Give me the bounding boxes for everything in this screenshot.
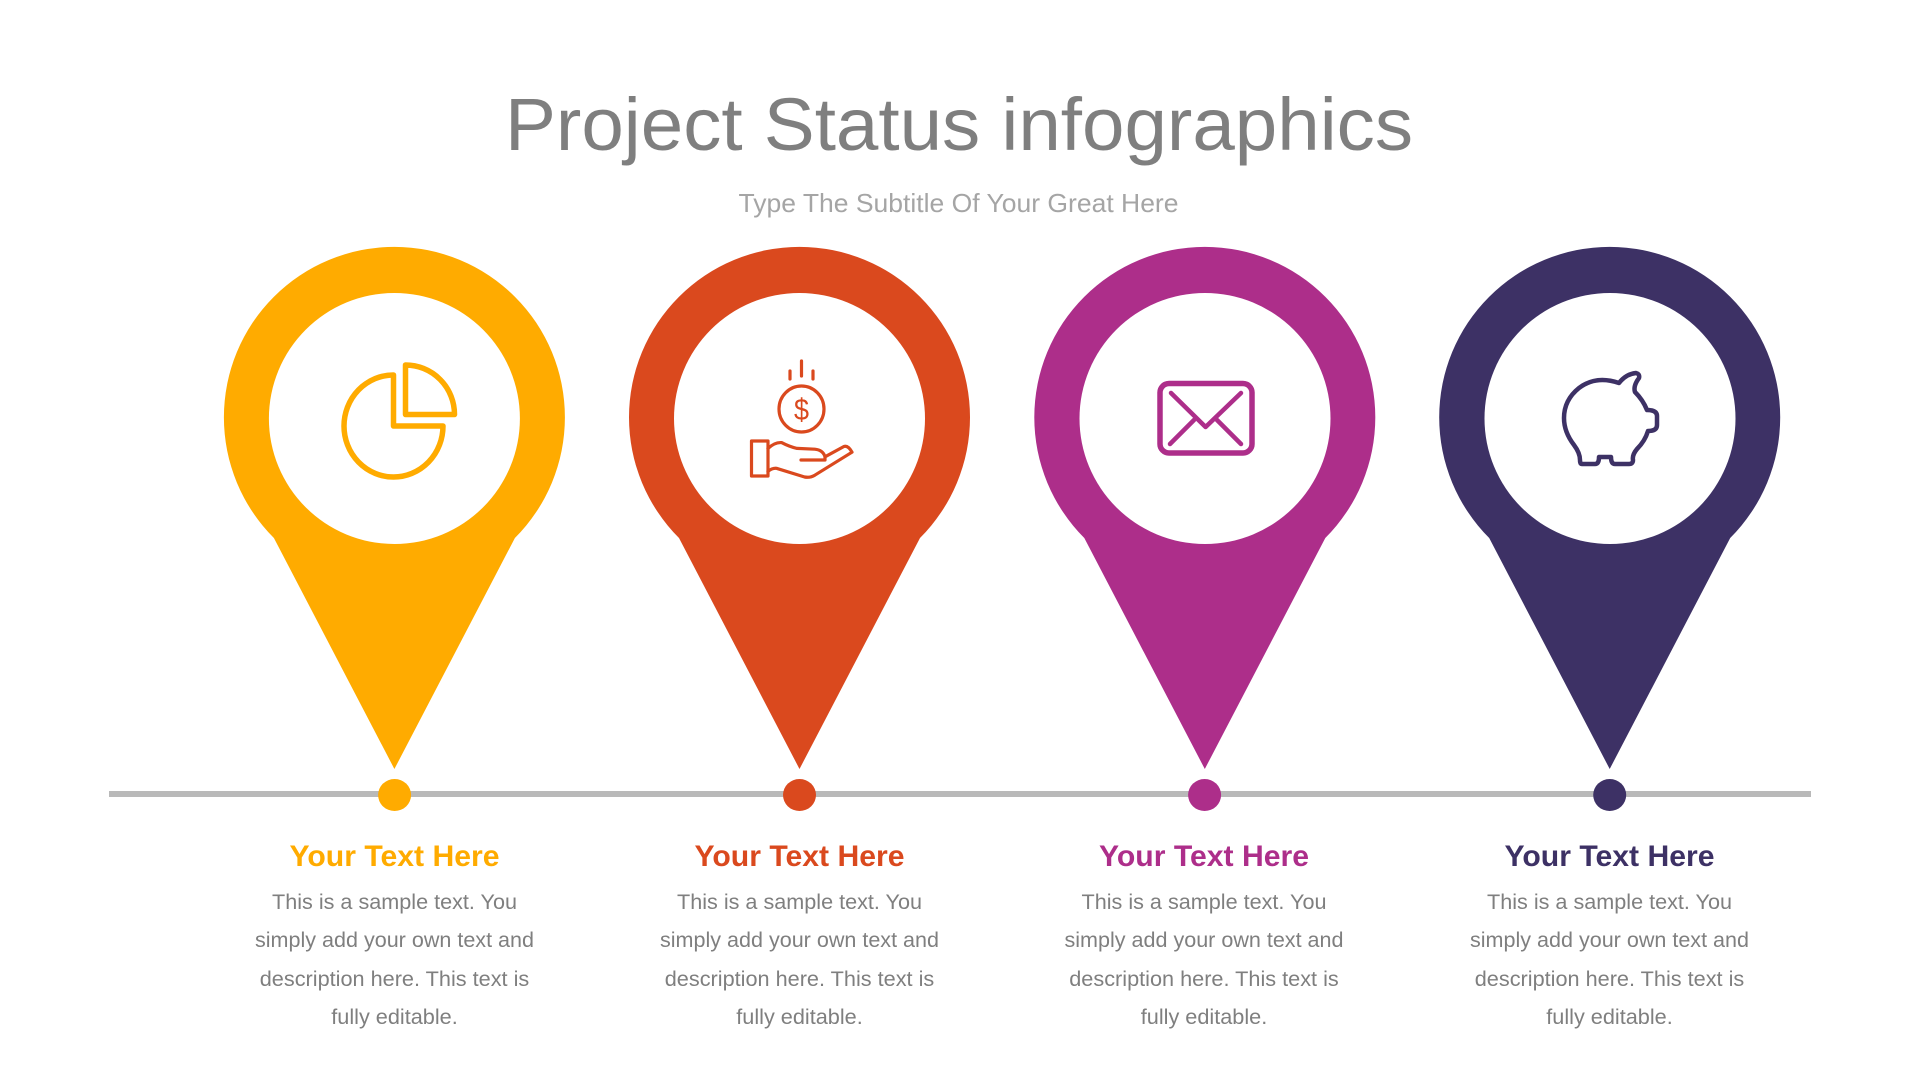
pin inner circle (1484, 293, 1736, 544)
icon: piggy bank (1564, 373, 1657, 464)
description: simply add your own text and (1470, 929, 1749, 952)
description: simply add your own text and (660, 929, 939, 952)
pin shape (629, 247, 970, 769)
description: fully editable. (1546, 1006, 1673, 1029)
description: This is a sample text. You (272, 891, 517, 914)
description: fully editable. (331, 1006, 458, 1029)
description: description here. This text is (1475, 968, 1744, 991)
pin inner circle (674, 293, 925, 544)
description: fully editable. (736, 1006, 863, 1029)
description: description here. This text is (260, 968, 529, 991)
description: simply add your own text and (255, 929, 534, 952)
icon: hand with coin: $ (794, 392, 809, 427)
description: This is a sample text. You (1487, 891, 1732, 914)
pin shape (224, 247, 565, 769)
heading: Your Text Here (290, 840, 500, 873)
title: Project Status infographics (505, 83, 1413, 166)
pin shape (1439, 247, 1780, 769)
pin shape (1034, 247, 1375, 769)
heading: Your Text Here (1504, 840, 1714, 873)
column 4: navy pin (1439, 247, 1780, 1029)
column 2: red pin (629, 247, 970, 1029)
timeline dot (378, 779, 411, 811)
timeline dot (1188, 779, 1221, 811)
timeline line (109, 791, 1811, 797)
pin inner circle (269, 293, 520, 544)
description: simply add your own text and (1064, 929, 1344, 952)
timeline dot (1593, 779, 1626, 811)
description (660, 891, 939, 1029)
timeline dot (783, 779, 816, 811)
description (1064, 891, 1344, 1029)
icon: envelope (1160, 384, 1252, 453)
icon: hand with coin (752, 361, 852, 477)
heading: Your Text Here (694, 840, 904, 873)
column 1: orange pin (224, 247, 565, 1029)
description: This is a sample text. You (677, 891, 922, 914)
heading: Your Text Here (1099, 840, 1309, 873)
description: description here. This text is (665, 968, 934, 991)
description: fully editable. (1141, 1006, 1267, 1029)
pin inner circle (1080, 293, 1330, 544)
description (255, 891, 534, 1029)
icon: pie chart (344, 365, 454, 477)
description (1470, 891, 1749, 1029)
description: description here. This text is (1069, 968, 1339, 991)
subtitle: Type The Subtitle Of Your Great Here (738, 188, 1178, 218)
description: This is a sample text. You (1082, 891, 1326, 914)
column 3: purple pin (1034, 247, 1375, 1029)
